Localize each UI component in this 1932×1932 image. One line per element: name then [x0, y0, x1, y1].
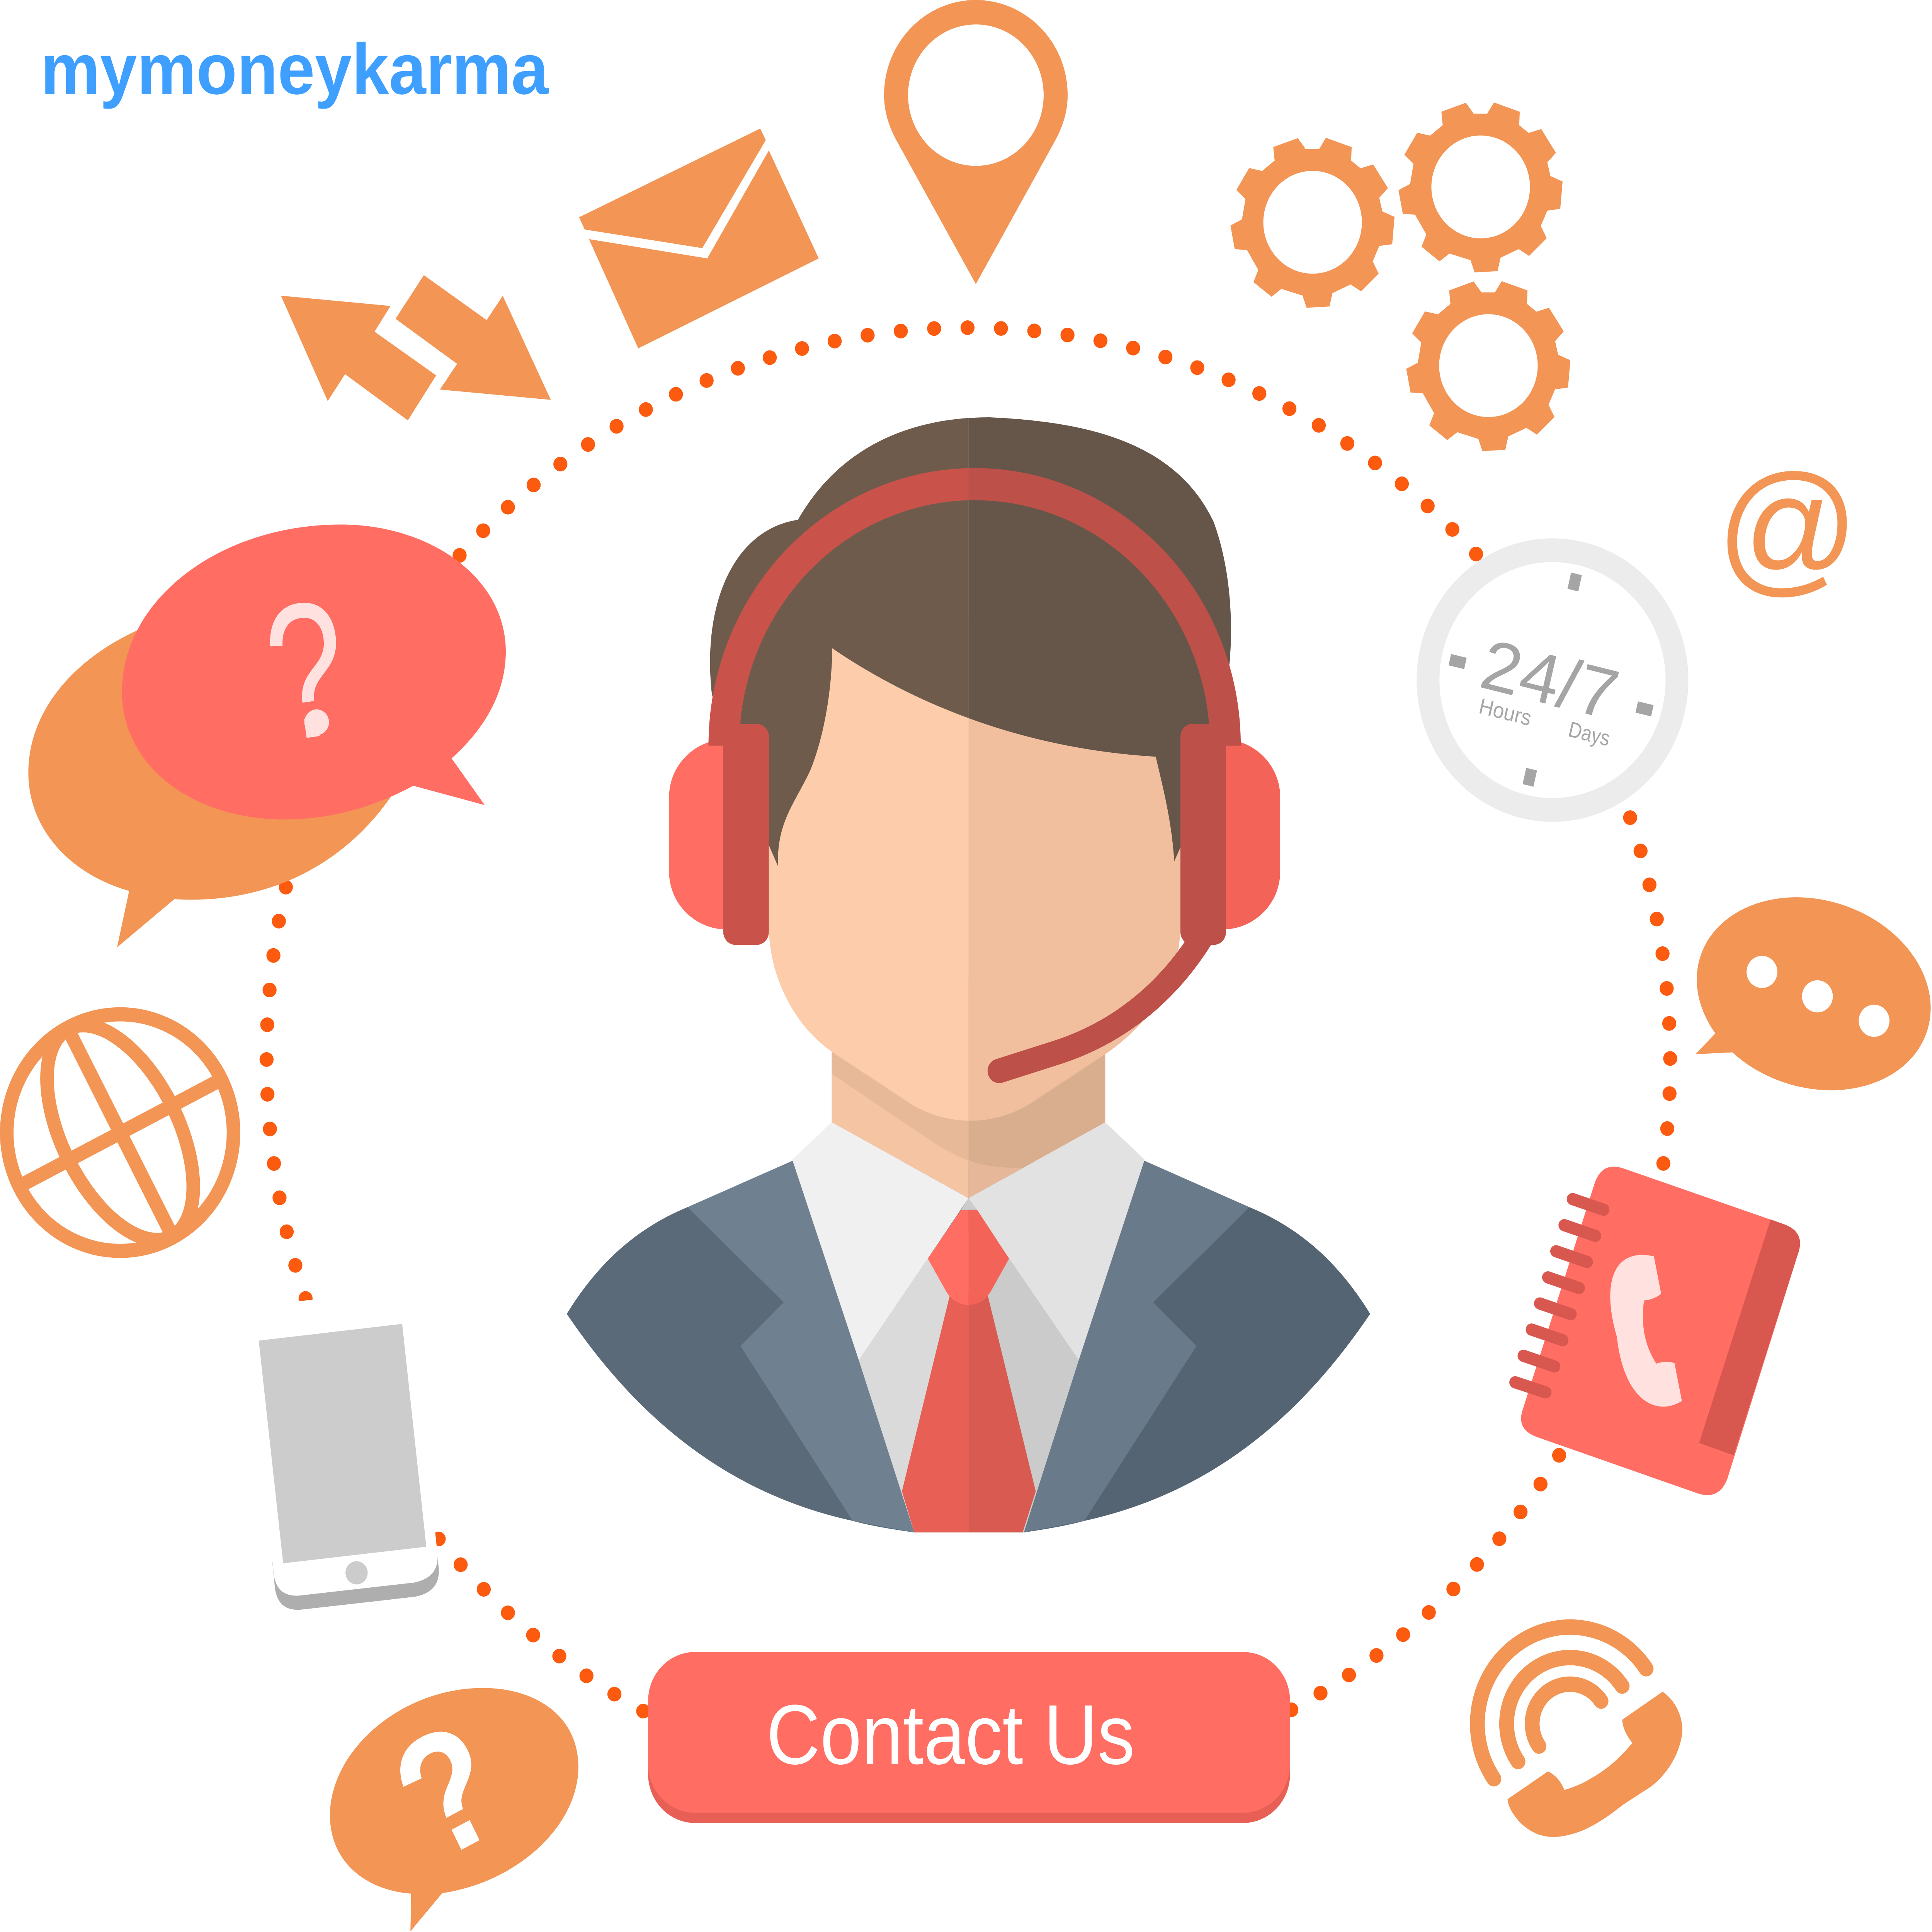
hours label: Hours	[1477, 694, 1534, 730]
face	[769, 617, 1180, 1121]
icon: location pin	[884, 0, 1068, 284]
icon: at sign: @	[1716, 445, 1859, 609]
icon: question bubble bottom: ?	[367, 1685, 528, 1897]
icon: globe	[7, 1001, 233, 1264]
central agent figure	[567, 417, 1370, 1532]
contact us button	[648, 1652, 1290, 1823]
jacket	[567, 1161, 1370, 1532]
dotted orbit ring	[267, 328, 1670, 1711]
icon: 24/7 clock	[1428, 550, 1677, 810]
button label: Contact Us	[766, 1687, 1135, 1782]
icon: speech bubbles with question mark: ?	[254, 559, 359, 783]
icon: chat bubble with dots	[1675, 869, 1932, 1118]
icon: envelope	[579, 129, 819, 349]
necktie	[902, 1210, 1036, 1532]
icon: three gears	[1230, 102, 1570, 451]
headset	[669, 484, 1280, 1071]
hair	[710, 417, 1231, 866]
icon: exchange arrows	[281, 275, 551, 420]
shirt	[792, 1122, 1145, 1532]
days label: Days	[1566, 717, 1612, 751]
24/7 label: 24/7	[1474, 624, 1626, 735]
neck	[825, 977, 1105, 1198]
logo: mymoneykarma: mymoneykarma	[41, 29, 549, 109]
icon: question bubble bottom	[330, 1685, 578, 1931]
icon: phone book	[1515, 1167, 1800, 1495]
icon: speech bubbles with question mark	[28, 524, 506, 947]
icon: ringing phone	[1477, 1627, 1682, 1837]
icon: smartphone	[250, 1292, 439, 1610]
